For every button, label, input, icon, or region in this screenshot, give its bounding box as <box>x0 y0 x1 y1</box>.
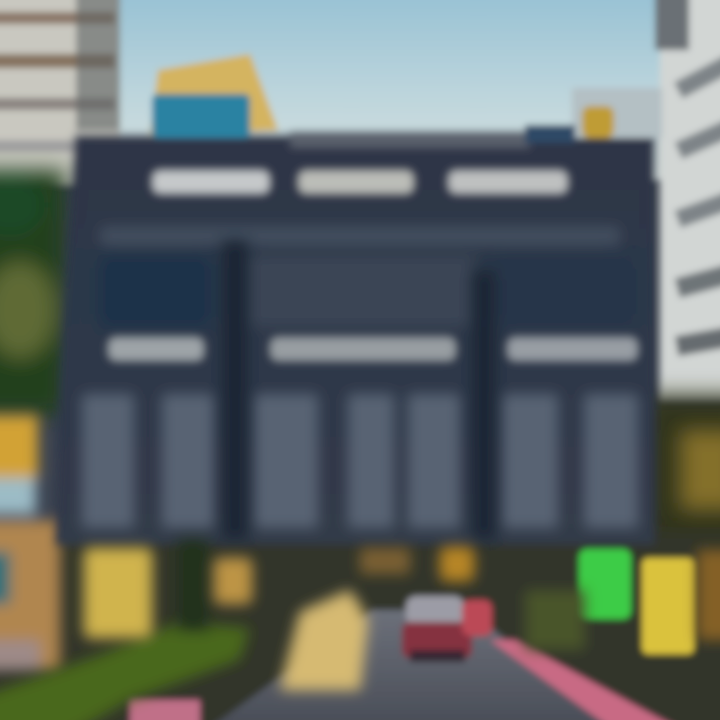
shops lower left <box>0 415 60 670</box>
storefront glow: small amber <box>214 558 252 604</box>
amber shop right <box>680 430 720 510</box>
vertical pillars <box>222 240 496 540</box>
lower-right dark surround <box>645 395 720 565</box>
hedge left <box>0 622 250 720</box>
street glow: pale yellow <box>280 590 368 690</box>
storefront glow: yellow left <box>84 548 152 638</box>
storefront: brown right edge <box>697 550 720 640</box>
subheading line <box>100 226 620 246</box>
data columns <box>82 394 638 528</box>
trees left <box>0 170 65 415</box>
storefront glow: central amber <box>440 547 474 581</box>
sky <box>0 0 720 180</box>
right tower <box>655 0 720 400</box>
shrubs right of road <box>525 590 585 650</box>
lower street backdrop <box>0 530 720 720</box>
upper band of building <box>290 132 530 148</box>
tree trunk centre-left <box>178 540 208 630</box>
column labels <box>108 337 638 361</box>
car: red <box>402 596 492 662</box>
panel: central dark building <box>55 132 655 545</box>
rooftop right block <box>525 88 662 143</box>
mid gray panel <box>245 255 475 327</box>
left tower <box>0 0 120 185</box>
sign: bright green <box>579 549 631 619</box>
road <box>200 610 620 720</box>
heading blocks <box>152 170 568 194</box>
storefront glow: yellow right <box>642 558 694 654</box>
rooftop sign: blue and yellow <box>150 54 278 138</box>
pink pavement <box>490 640 690 720</box>
